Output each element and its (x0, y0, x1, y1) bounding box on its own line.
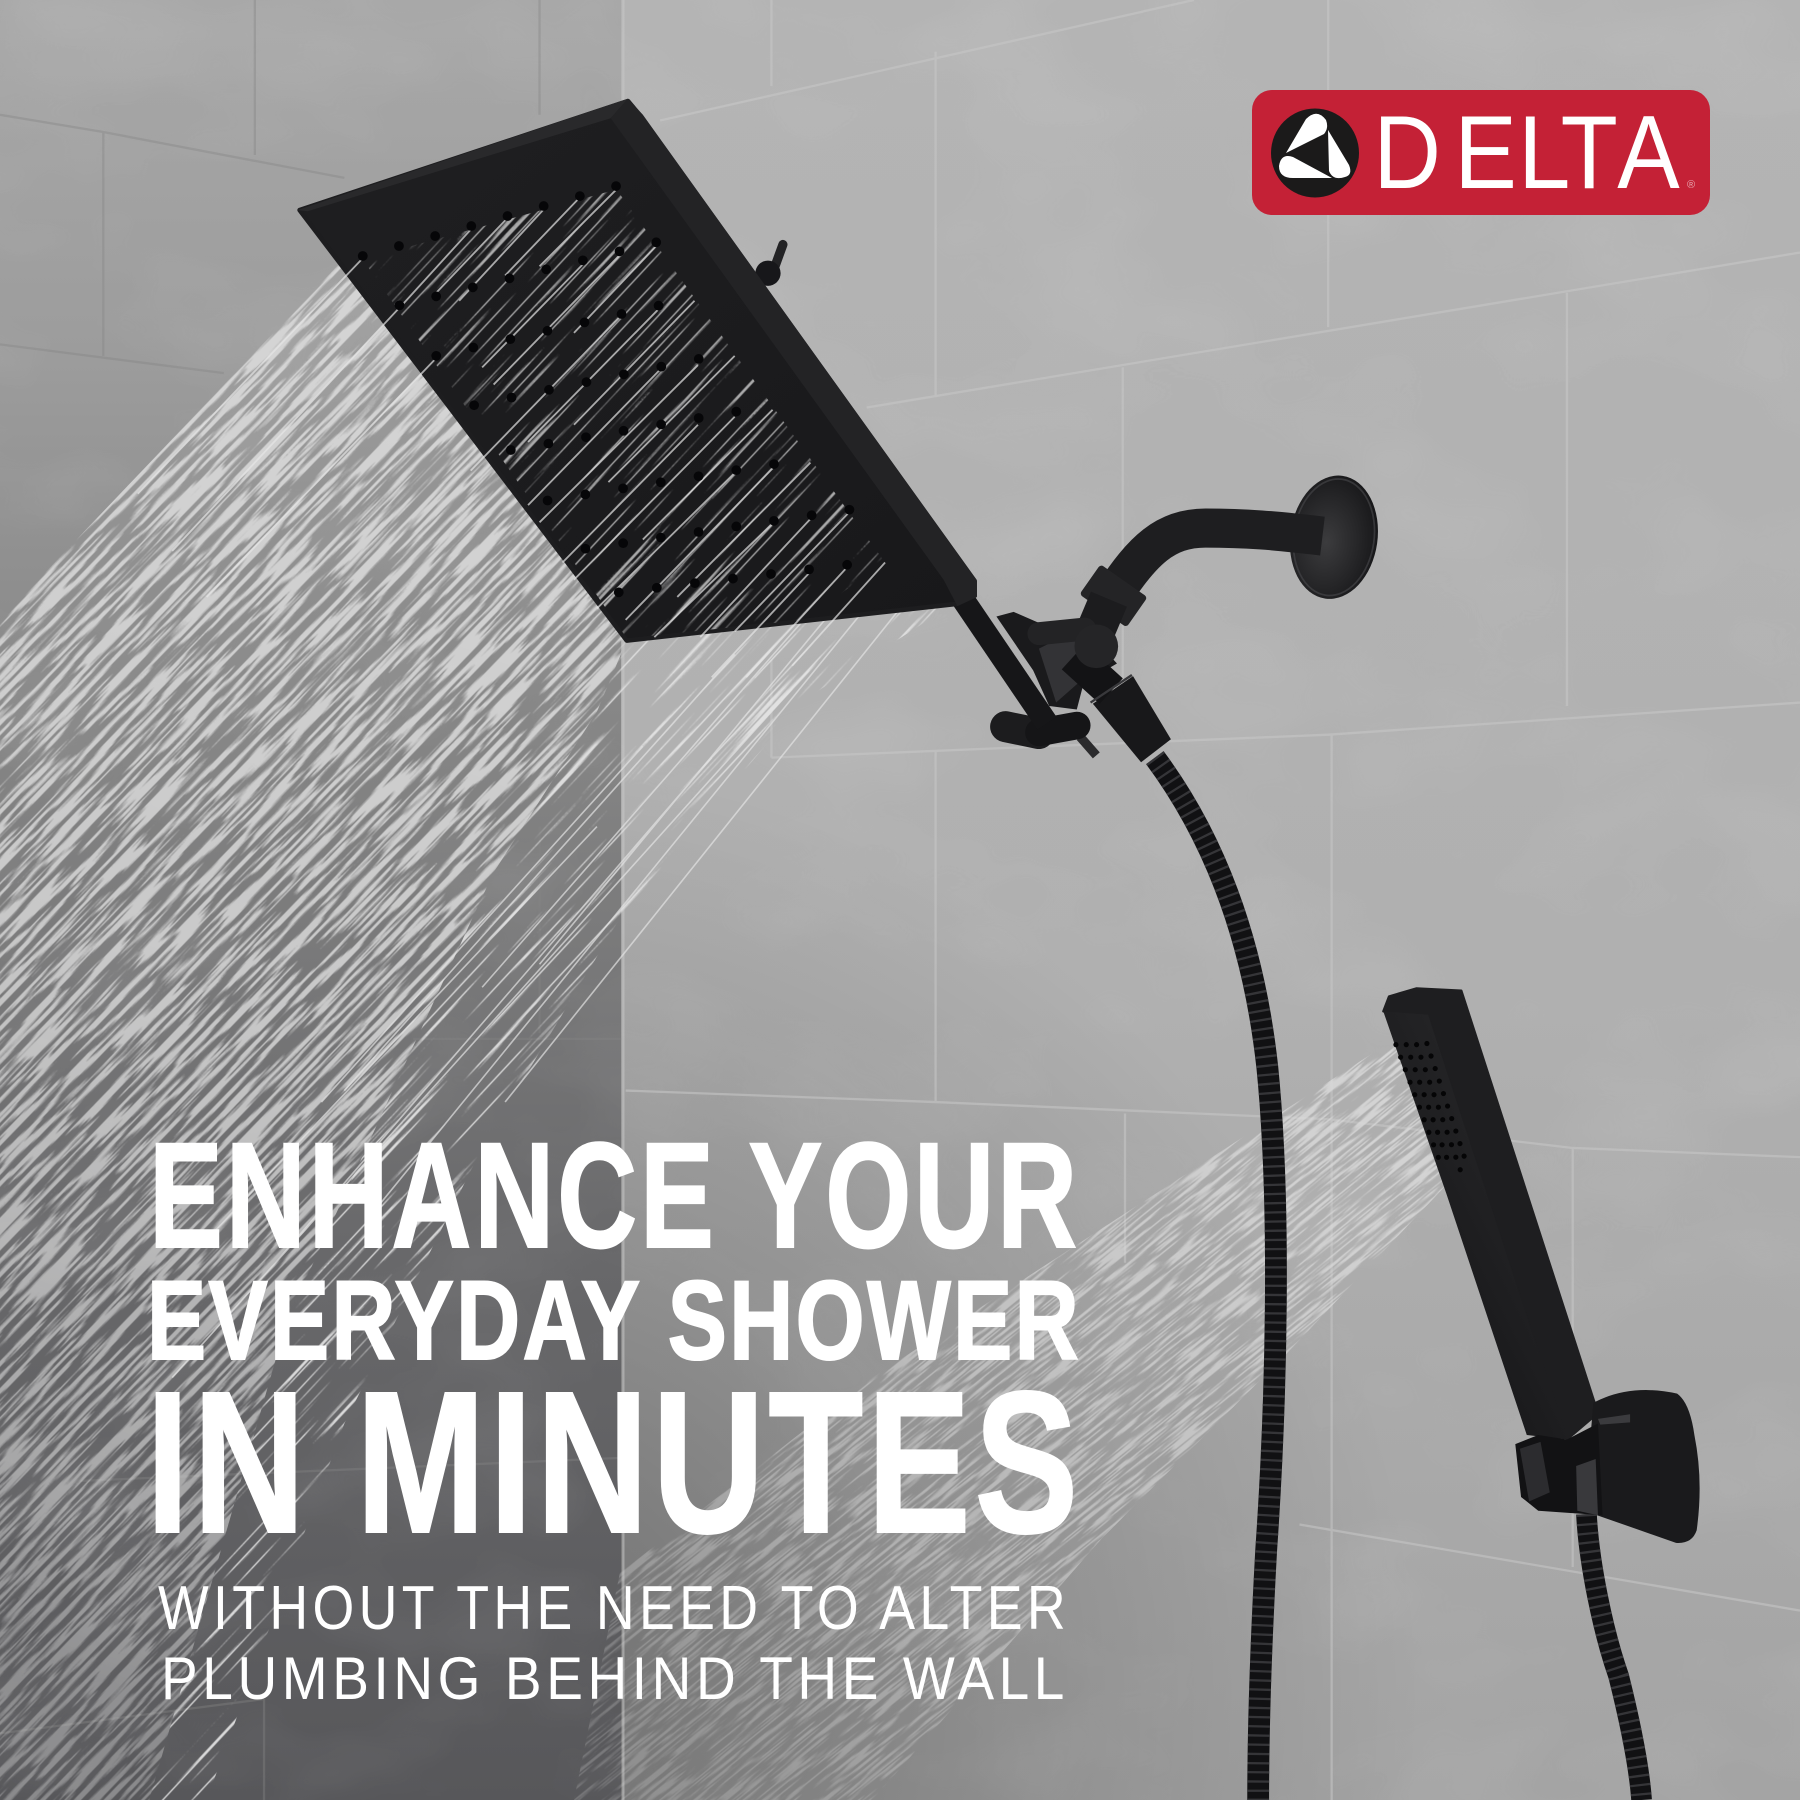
subheading line 1: WITHOUT THE NEED TO ALTER (158, 1574, 1070, 1643)
logo: registered mark: ® (1687, 179, 1695, 191)
logo: wordmark: DELTA (1373, 93, 1680, 210)
swivel barrel and pin (1006, 726, 1096, 755)
spray: sparse water at the right edge (149, 597, 964, 1800)
wall mount bracket (1515, 1390, 1700, 1543)
shower head spray holes (363, 186, 885, 592)
spray: rain shower dense water on the wall (0, 255, 626, 1800)
hand shower side (1383, 988, 1598, 1440)
logo: triangle emblem (1271, 108, 1359, 198)
mount slot (1598, 1414, 1630, 1425)
hand shower face (1383, 1011, 1567, 1440)
headline (146, 1111, 1082, 1575)
shower head side edge (611, 99, 977, 606)
spray: handheld water fan (574, 1039, 1449, 1800)
diverter: swivel body (996, 599, 1171, 762)
rain shower head (138, 99, 977, 677)
rod from shower head (957, 591, 1047, 723)
pivot knob behind shower head (755, 245, 783, 286)
wall: lower-left shading (621, 0, 1800, 1800)
handheld shower (1383, 988, 1598, 1440)
water texture over the shower face (363, 189, 885, 638)
headline line 2: EVERYDAY SHOWER (147, 1258, 1081, 1383)
hose: main ribbed hose (1155, 758, 1276, 1800)
wall: far tiled wall (0, 0, 626, 1800)
headline line 1: ENHANCE YOUR (149, 1111, 1080, 1279)
spray: long thin streaks at the right edge (172, 585, 918, 1378)
shower head top edge (297, 99, 628, 211)
shower arm: flange and curved arm (1079, 470, 1386, 627)
subheading line 2: PLUMBING BEHIND THE WALL (161, 1645, 1069, 1712)
wall: side tiled wall (621, 0, 1800, 1800)
hand shower nozzles (1396, 1043, 1468, 1170)
headline line 3: IN MINUTES (146, 1349, 1082, 1575)
hand shower hose (1586, 1514, 1642, 1800)
threaded nut (1079, 564, 1148, 627)
subheading (158, 1574, 1070, 1712)
mount clamp barrel (1515, 1423, 1603, 1515)
water jets leaving the holes (138, 189, 885, 677)
logo: Delta badge (1252, 90, 1710, 215)
